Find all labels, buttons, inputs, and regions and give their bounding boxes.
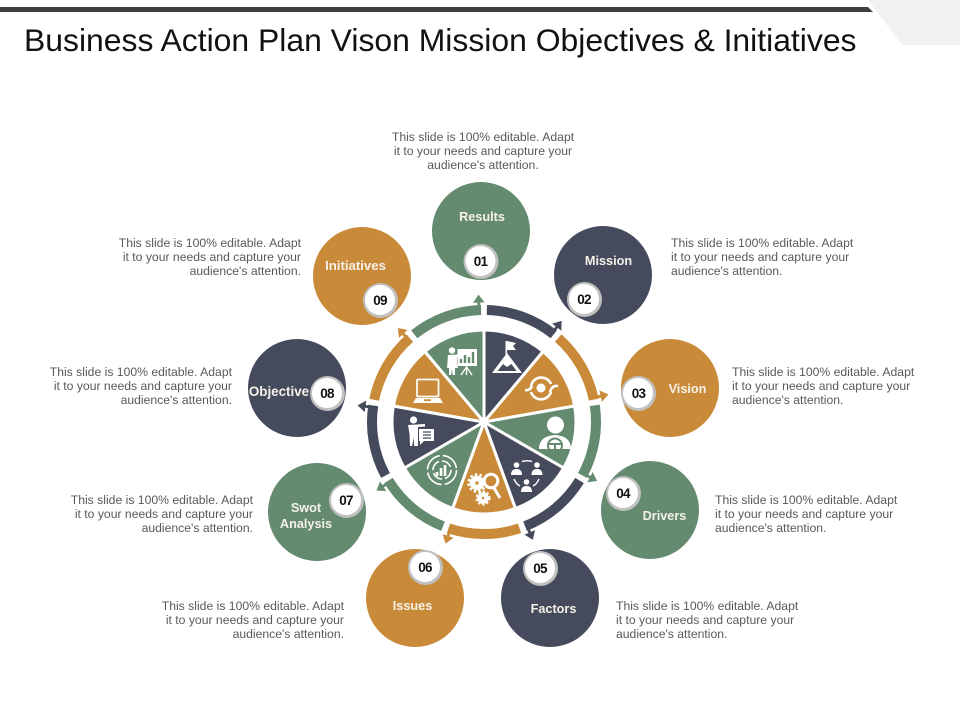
item 04: Drivers: 04 xyxy=(616,486,631,501)
text block: Drivers description: This slide is 100% editable. Adapt xyxy=(715,493,898,507)
icon: person with steering wheel xyxy=(539,416,571,452)
item 04: Drivers: Drivers xyxy=(643,509,686,523)
item 03: Vision: 03 xyxy=(632,386,646,401)
icon: presenter with chart board xyxy=(447,347,477,375)
pie wedges xyxy=(375,314,588,529)
text block: Results description: This slide is 100% editable. Adapt xyxy=(392,130,575,144)
text block: Drivers description: audience's attention. xyxy=(715,521,826,535)
top corner decoration xyxy=(868,0,960,45)
icon: mountain with flag xyxy=(492,341,522,373)
icon: process swirl xyxy=(525,378,558,399)
item 07: Swot Analysis: Swot xyxy=(291,501,322,515)
icon: person with checklist bubble xyxy=(408,416,434,446)
item 02: Mission: Mission xyxy=(585,254,632,268)
text block: Mission description: audience's attention. xyxy=(671,264,782,278)
item 04: Drivers xyxy=(601,461,699,559)
text block: Initiatives description xyxy=(119,236,302,278)
item 05: Factors: Factors xyxy=(531,602,576,616)
item 07: Swot Analysis xyxy=(268,463,366,561)
text block: Objective description xyxy=(50,365,233,407)
title: Business Action Plan Vison Mission Objectives & Initiatives xyxy=(24,22,857,58)
text block: Initiatives description: audience's attention. xyxy=(190,264,301,278)
text block: Initiatives description: it to your needs and capture your xyxy=(123,250,301,264)
item 06: Issues: Issues xyxy=(393,599,432,613)
item 01: Results: Results xyxy=(459,210,505,224)
item 01: Results xyxy=(432,182,530,280)
text block: Issues description: it to your needs and capture your xyxy=(166,613,344,627)
text block: Factors description: it to your needs and capture your xyxy=(616,613,794,627)
icon: laptop xyxy=(413,380,443,403)
text block: Objective description: This slide is 100% editable. Adapt xyxy=(50,365,233,379)
icon: connected people xyxy=(511,461,542,492)
top bar xyxy=(0,7,873,12)
item 05: Factors: 05 xyxy=(533,561,548,576)
ring of arrows xyxy=(346,283,619,555)
text block: Factors description: This slide is 100% editable. Adapt xyxy=(616,599,799,613)
text block: Factors description: audience's attention. xyxy=(616,627,727,641)
panel: central wheel xyxy=(346,283,619,555)
icon: gears with magnifier xyxy=(468,474,500,504)
text block: Swot Analysis description xyxy=(71,493,254,535)
item 02: Mission: 02 xyxy=(577,292,591,307)
text block: Objective description: it to your needs and capture your xyxy=(54,379,232,393)
text block: Mission description: it to your needs and capture your xyxy=(671,250,849,264)
text block: Swot Analysis description: it to your needs and capture your xyxy=(75,507,253,521)
text block: Vision description: This slide is 100% editable. Adapt xyxy=(732,365,915,379)
text block: Vision description xyxy=(732,365,915,407)
item 09: Initiatives: 09 xyxy=(373,293,387,308)
item 06: Issues xyxy=(366,549,464,647)
text block: Initiatives description: This slide is 100% editable. Adapt xyxy=(119,236,302,250)
item 08: Objective: 08 xyxy=(320,386,335,401)
item 02: Mission xyxy=(554,226,652,324)
text block: Swot Analysis description: audience's attention. xyxy=(142,521,253,535)
icon: target chart xyxy=(428,456,456,484)
item 09: Initiatives xyxy=(313,227,411,325)
item 07: Swot Analysis: Analysis xyxy=(280,517,332,531)
text block: Results description: it to your needs and capture your xyxy=(394,144,572,158)
text block: Issues description: audience's attention. xyxy=(233,627,344,641)
text block: Results description: audience's attention. xyxy=(427,158,539,172)
text block: Mission description: This slide is 100% editable. Adapt xyxy=(671,236,854,250)
item 03: Vision: Vision xyxy=(669,382,706,396)
text block: Issues description xyxy=(162,599,345,641)
text block: Drivers description xyxy=(715,493,898,535)
item 07: Swot Analysis: 07 xyxy=(339,493,353,508)
item 05: Factors xyxy=(501,549,599,647)
item 03: Vision xyxy=(621,339,719,437)
text block: Results description xyxy=(392,130,575,172)
text block: Drivers description: it to your needs and capture your xyxy=(715,507,893,521)
text block: Mission description xyxy=(671,236,854,278)
item 09: Initiatives: Initiatives xyxy=(325,258,386,273)
text block: Factors description xyxy=(616,599,799,641)
text block: Vision description: it to your needs and capture your xyxy=(732,379,910,393)
text block: Issues description: This slide is 100% editable. Adapt xyxy=(162,599,345,613)
text block: Swot Analysis description: This slide is 100% editable. Adapt xyxy=(71,493,254,507)
item 08: Objective xyxy=(248,339,346,437)
text block: Objective description: audience's attention. xyxy=(121,393,232,407)
item 08: Objective: Objective xyxy=(249,384,309,399)
item 06: Issues: 06 xyxy=(418,560,433,575)
item 01: Results: 01 xyxy=(474,254,488,269)
text block: Vision description: audience's attention. xyxy=(732,393,843,407)
